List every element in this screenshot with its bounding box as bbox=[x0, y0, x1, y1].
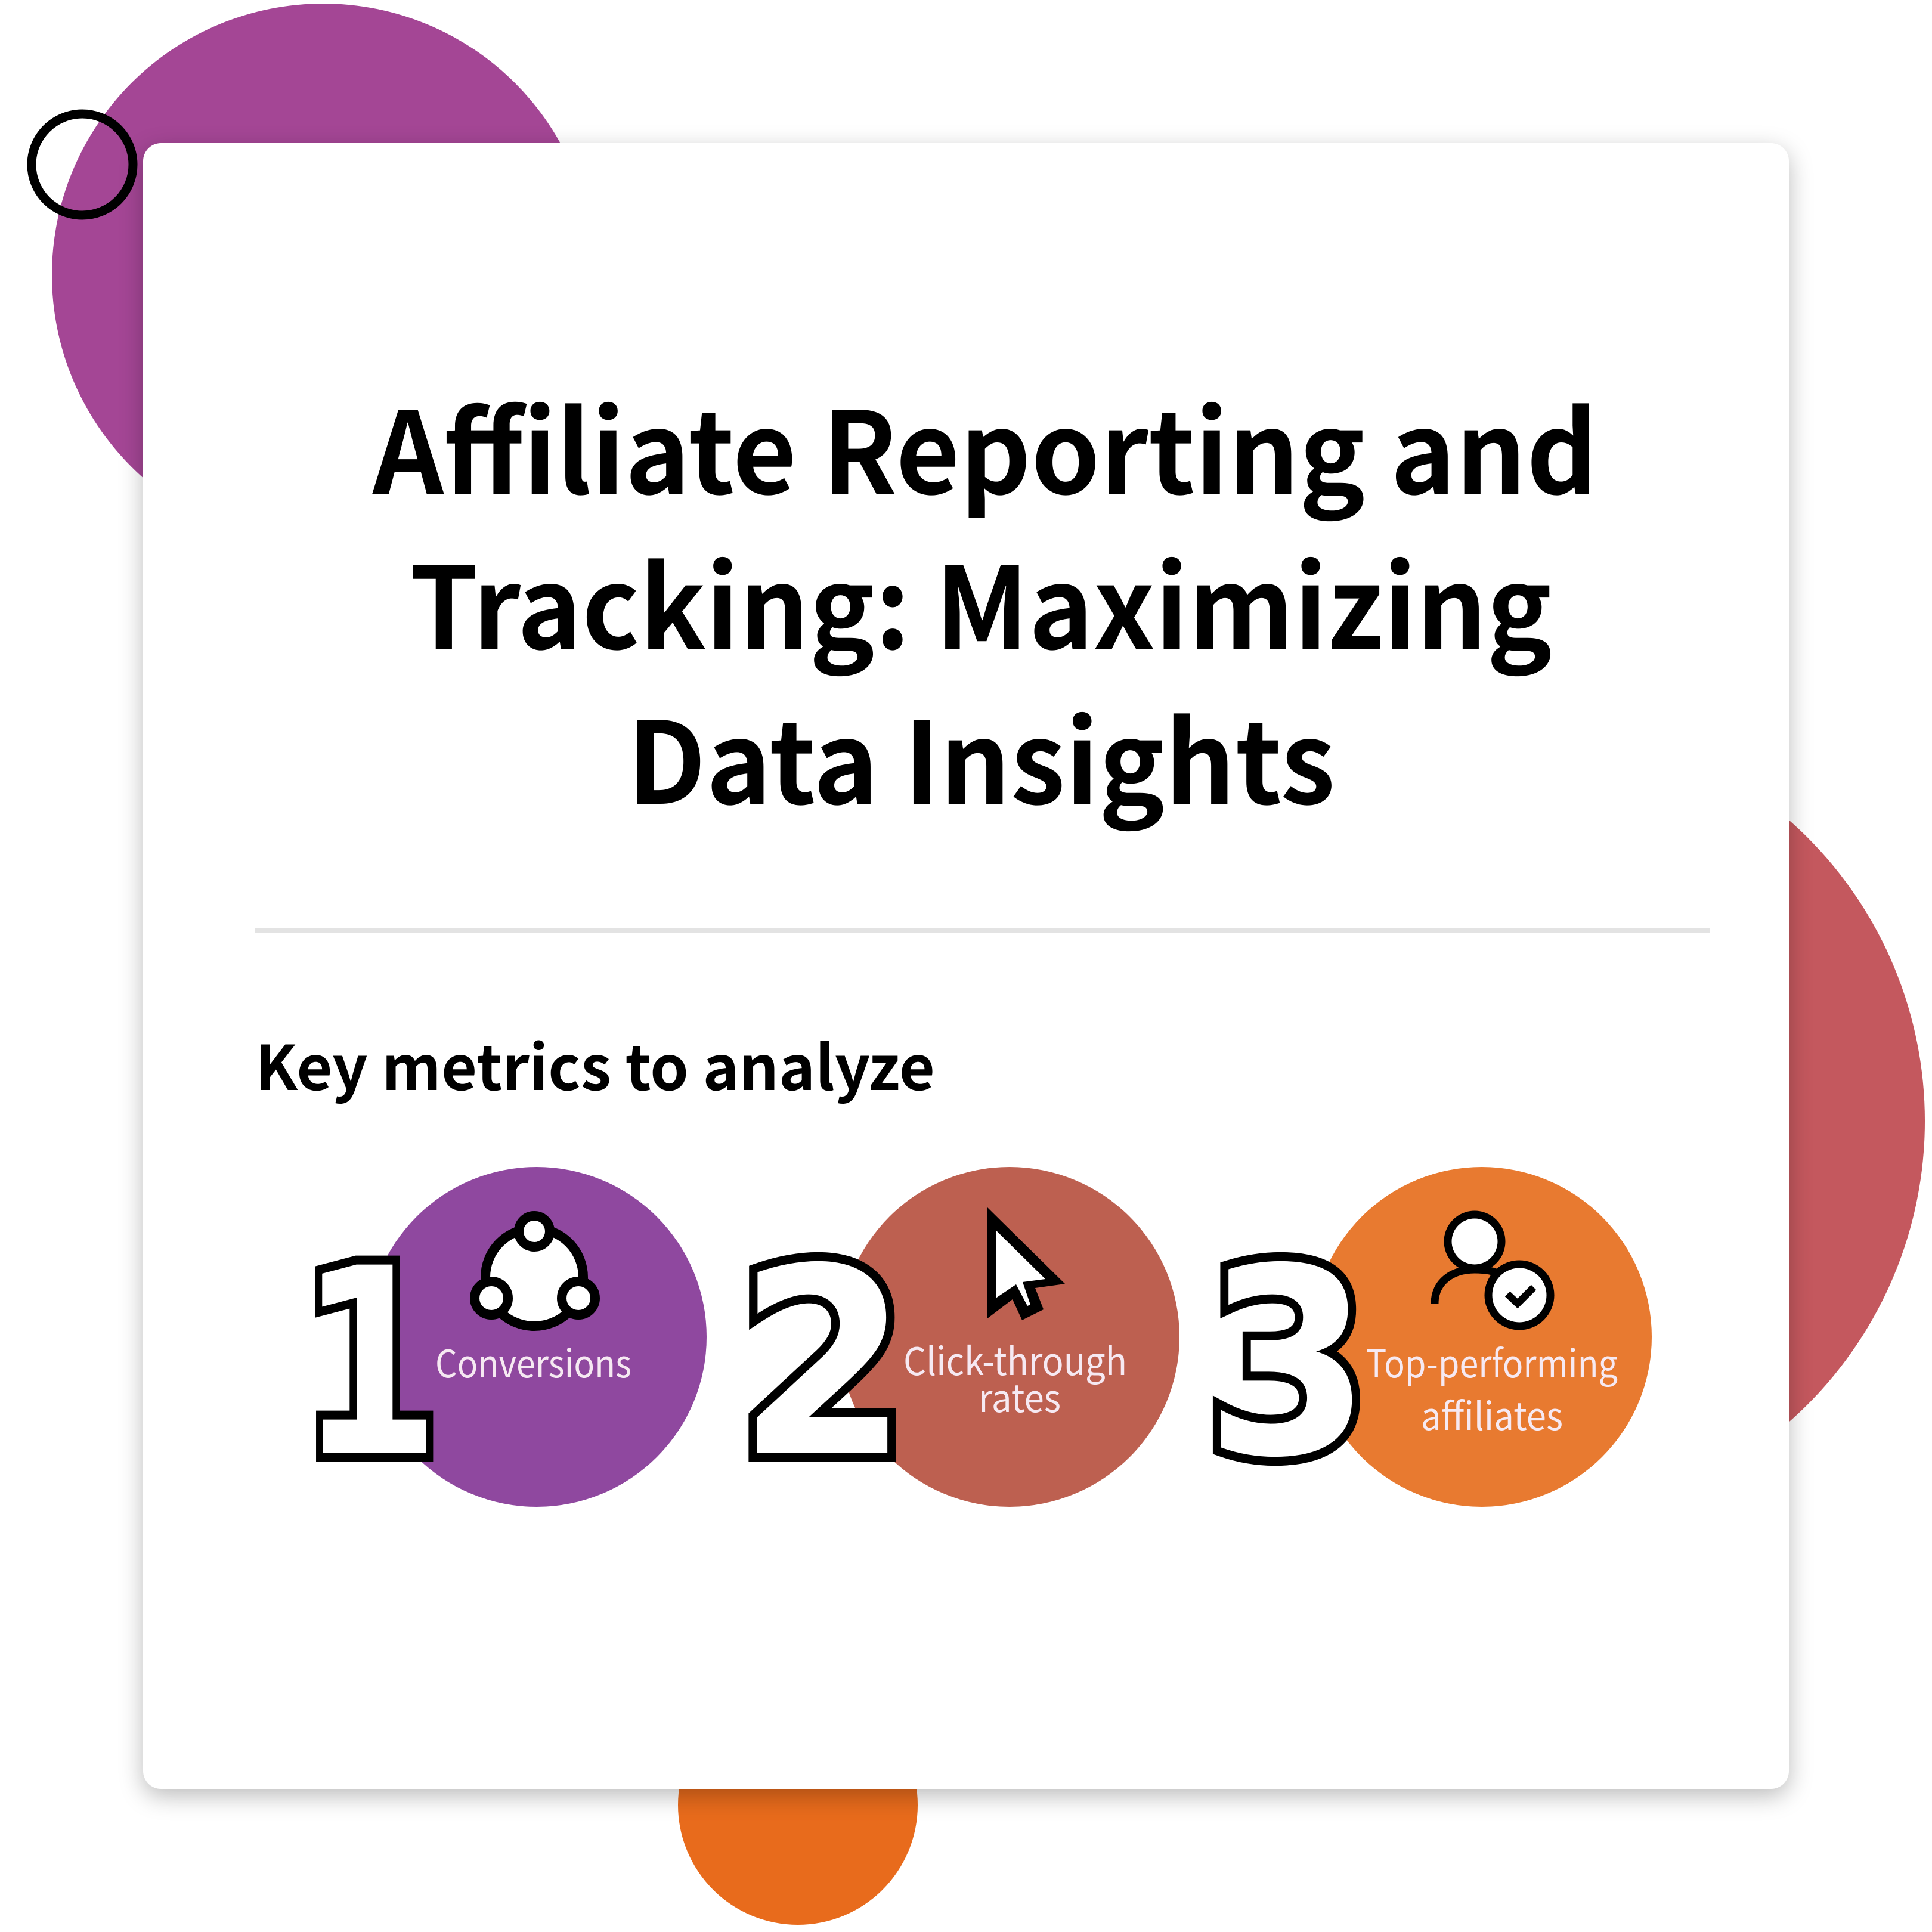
label: top-performing affiliates bbox=[1366, 1334, 1618, 1441]
large purple circle bbox=[52, 4, 595, 546]
title: Data Insights bbox=[627, 673, 1335, 837]
title: Tracking: Maximizing bbox=[410, 518, 1552, 682]
label: top-performing affiliates: Top-performing bbox=[1366, 1334, 1618, 1389]
purple metric circle bbox=[367, 1167, 707, 1507]
label: click-through rates: Click-through bbox=[903, 1332, 1127, 1386]
title: Affiliate Reporting and bbox=[372, 363, 1597, 527]
number 3: 3 bbox=[1205, 1213, 1371, 1515]
large orange circle bbox=[678, 1685, 918, 1925]
panel: white card bbox=[143, 143, 1789, 1789]
icon: cursor arrow bbox=[987, 1208, 1065, 1320]
number 1: 1 bbox=[299, 1213, 440, 1515]
label: click-through rates: rates bbox=[979, 1368, 1061, 1423]
label: click-through rates bbox=[903, 1332, 1127, 1423]
icon: connected circles bbox=[475, 1216, 595, 1326]
label: top-performing affiliates: affiliates bbox=[1421, 1386, 1563, 1441]
title bbox=[372, 363, 1597, 837]
orange metric circle bbox=[1312, 1167, 1652, 1507]
heading: key metrics: Key metrics to analyze bbox=[255, 1019, 935, 1108]
large red circle bbox=[1122, 720, 1925, 1522]
divider line bbox=[255, 928, 1710, 933]
black outline ring bbox=[32, 114, 133, 215]
red-brown metric circle bbox=[840, 1167, 1179, 1507]
number 2: 2 bbox=[738, 1213, 909, 1515]
icon: person with check bbox=[1435, 1215, 1550, 1326]
label: conversions: Conversions bbox=[435, 1334, 631, 1389]
